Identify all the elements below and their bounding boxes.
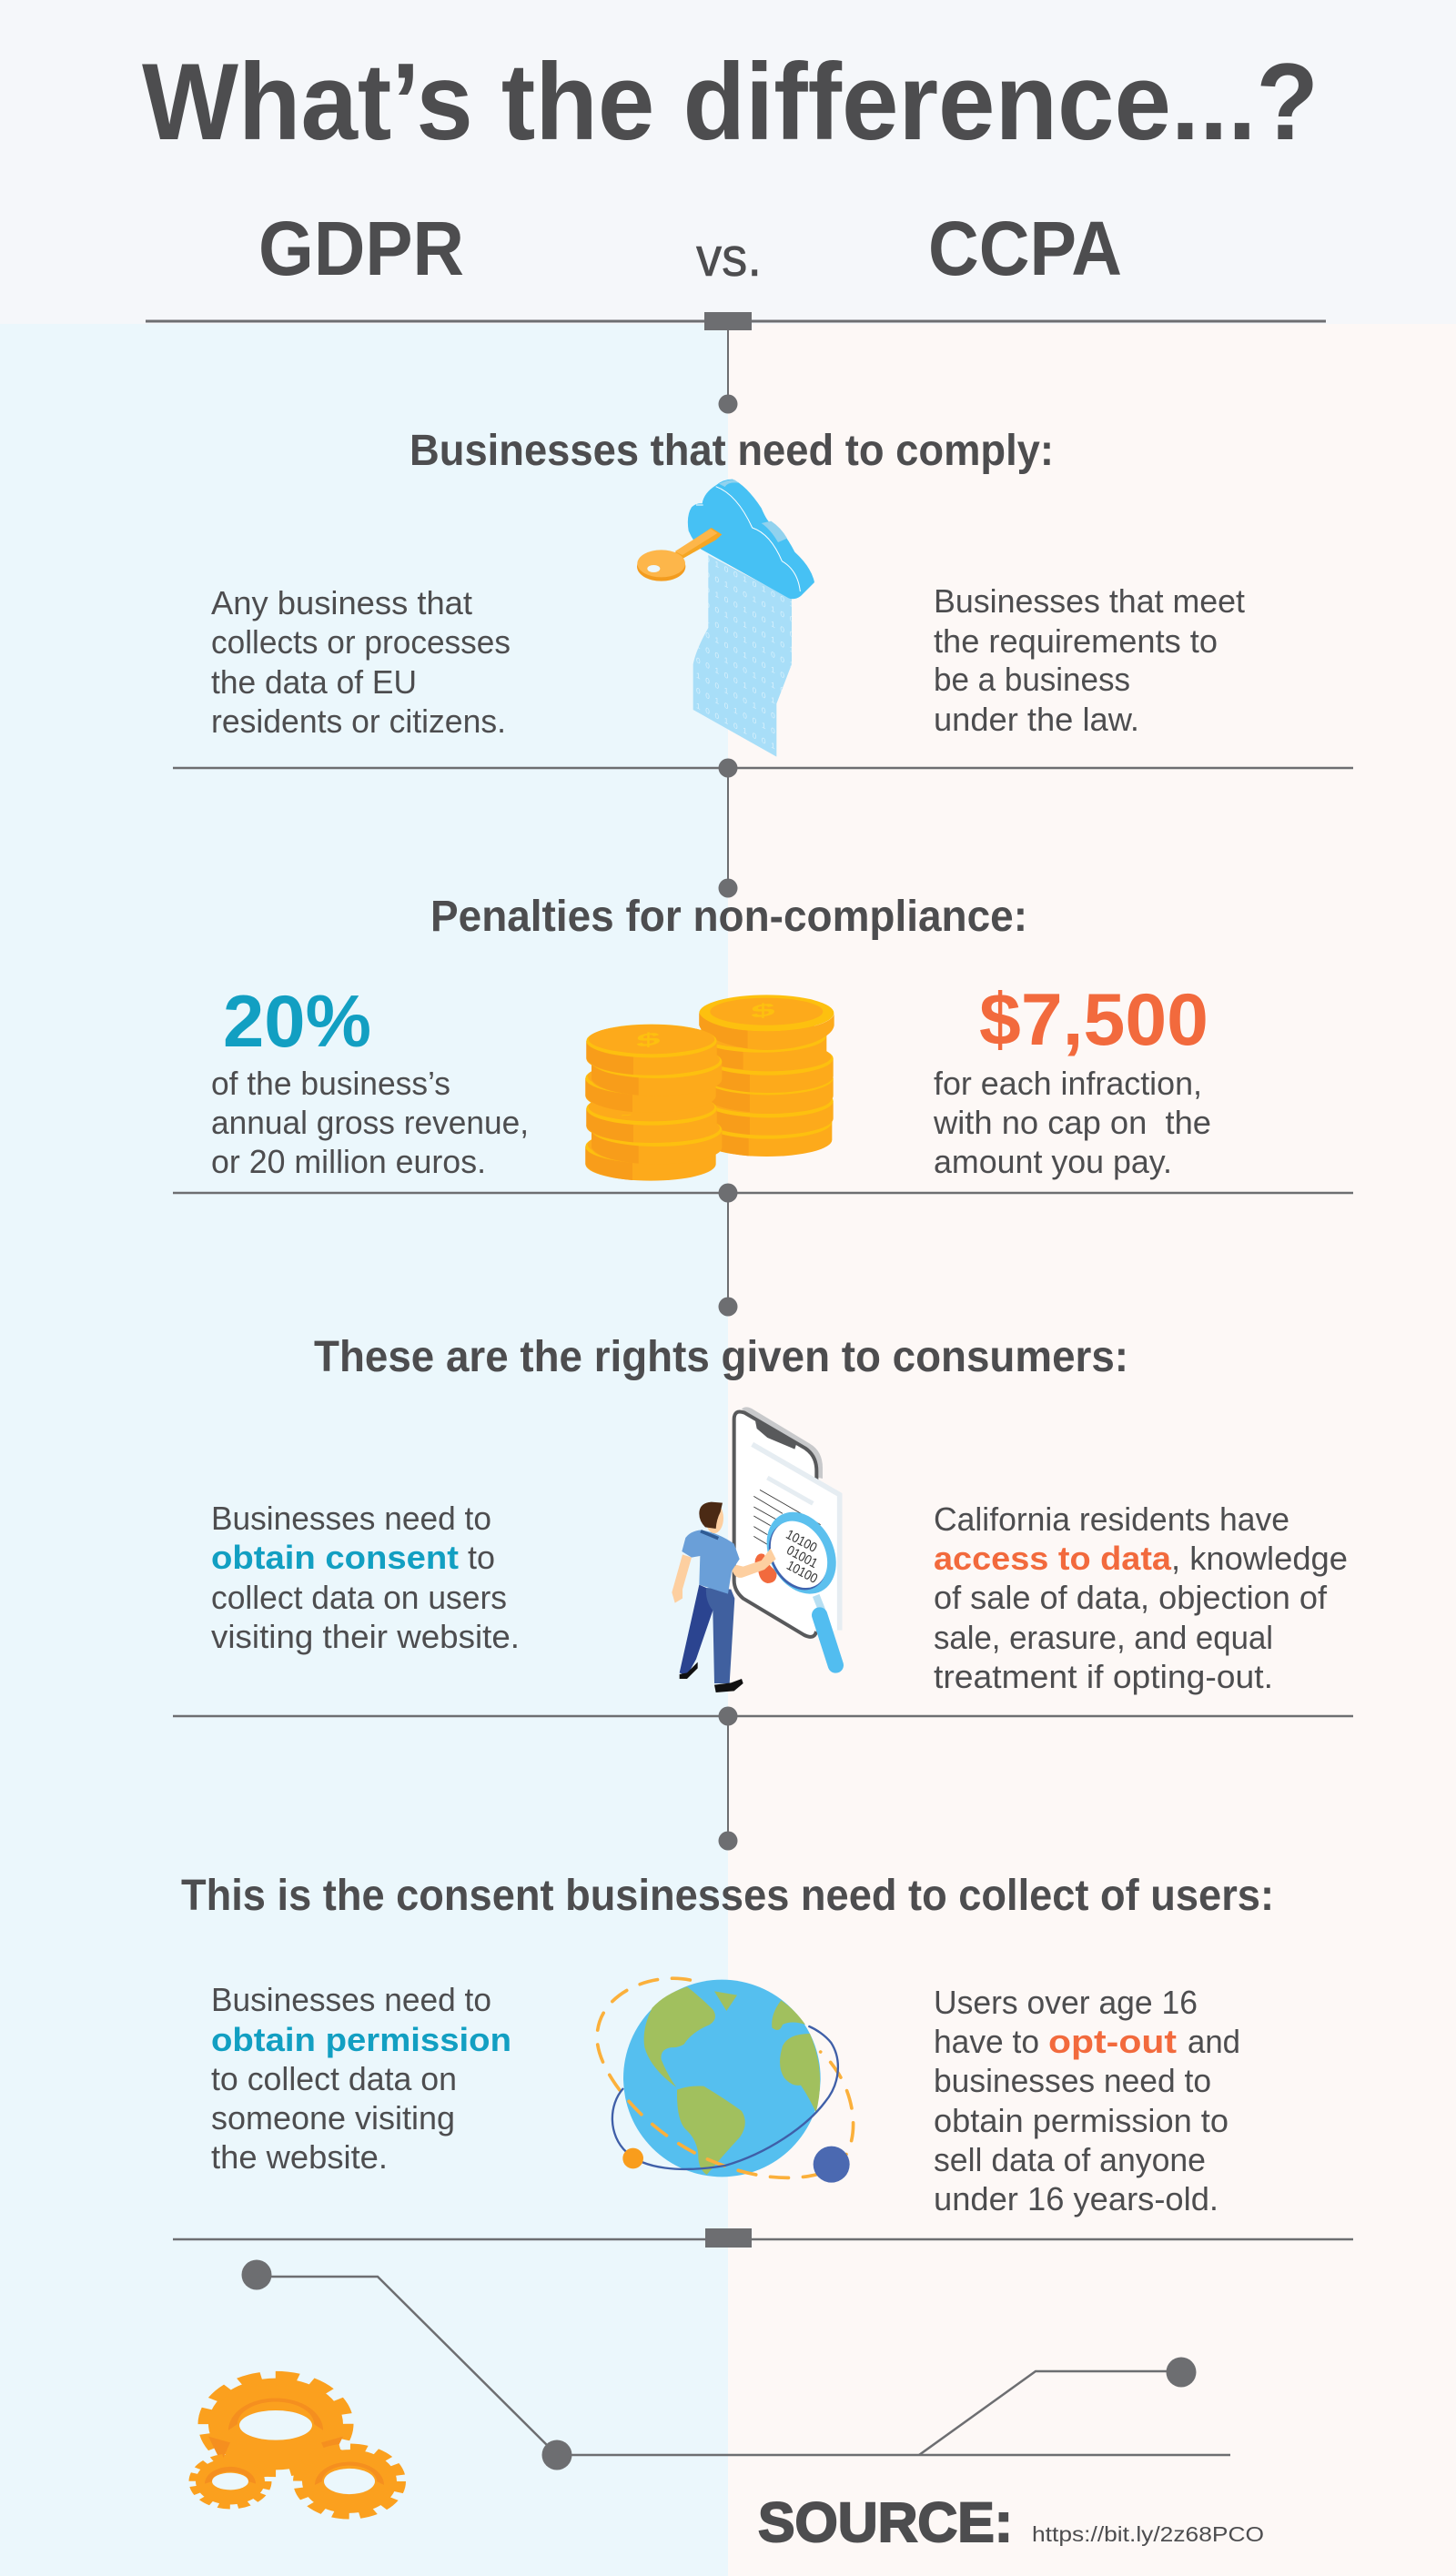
text: CCPA consent (934, 1984, 1240, 2217)
icon: cloud, key and data stream: 1 0 0 1 0 0 1 0 1 0 0 (696, 564, 795, 625)
text: CCPA consent: obtain permission to (934, 2102, 1228, 2139)
text: GDPR who must comply: Any business that (211, 584, 472, 621)
text: CCPA consumer rights: treatment if opting-out. (934, 1658, 1273, 1695)
text: GDPR consent: Businesses need to (211, 1981, 491, 2018)
text: CCPA consumer rights: sale, erasure, and equal (934, 1619, 1273, 1656)
icon: person inspecting phone with magnifier: 10100 (784, 1528, 819, 1556)
icon: gears (193, 2376, 400, 2516)
text: CCPA penalty (933, 1065, 1211, 1180)
heading: GDPR vs. CCPA: CCPA (928, 206, 1122, 291)
decorative circuit lines (242, 2260, 1230, 2470)
text: GDPR who must comply: the data of EU (211, 663, 417, 701)
text: CCPA who must comply: Businesses that meet (934, 582, 1245, 620)
icon: cloud, key and data stream: 0 0 1 0 1 0 0 1 0 0 1 (696, 685, 795, 747)
icon: cloud, key and data stream: 0 0 1 0 0 1 0 0 1 0 0 (696, 625, 795, 686)
icon: coin stacks: $ (636, 1027, 661, 1052)
text: CCPA consent: have to (934, 2023, 1039, 2060)
icon: cloud, key and data stream: 0 0 1 0 0 1 0 0 1 0 0 (696, 655, 795, 716)
text: CCPA who must comply: the requirements to (934, 622, 1218, 660)
icon: cloud, key and data stream: 1 0 0 1 0 0 1 0 0 1 0 (696, 671, 795, 732)
source: SOURCE: (758, 2491, 1013, 2553)
heading: GDPR vs. CCPA (258, 206, 1122, 291)
text: CCPA penalty: with no cap on the (933, 1104, 1211, 1141)
text: CCPA consent: opt-out (1048, 2023, 1177, 2060)
text: CCPA who must comply: under the law. (934, 701, 1139, 738)
section 2 heading: Penalties for non-compliance: (430, 893, 1027, 941)
source: https://bit.ly/2z68PCO (1032, 2522, 1264, 2546)
timeline connectors (146, 312, 1353, 2248)
heading: GDPR vs. CCPA: vs. (696, 227, 762, 288)
text: GDPR consent: the website. (211, 2138, 388, 2176)
text: CCPA who must comply: be a business (934, 661, 1130, 698)
icon: cloud, key and data stream: 1 0 0 1 0 1 0 0 1 0 0 (696, 701, 795, 762)
text: CCPA consent: and (1188, 2023, 1240, 2060)
text: GDPR consumer rights: obtain consent (211, 1539, 459, 1576)
icon: cloud, key and data stream (637, 480, 814, 762)
text: CCPA penalty: for each infraction, (934, 1065, 1202, 1102)
icon: person inspecting phone with magnifier: 01001 (784, 1543, 820, 1571)
icon: coin stacks: $ (751, 998, 775, 1023)
text: CCPA consumer rights: California residents have (934, 1500, 1289, 1538)
text: GDPR penalty (211, 1065, 529, 1180)
icon: person inspecting phone with magnifier (672, 1407, 850, 1692)
icon: coin stacks: - (621, 1112, 632, 1118)
text: GDPR who must comply (211, 584, 511, 740)
text: GDPR who must comply: residents or citizens. (211, 702, 506, 740)
text: CCPA consent: Users over age 16 (934, 1984, 1198, 2021)
text: GDPR penalty: or 20 million euros. (211, 1143, 486, 1180)
text: GDPR penalty: of the business’s (211, 1065, 450, 1102)
stat: 20%: 20% (223, 981, 371, 1063)
icon: cloud, key and data stream: 0 0 1 0 0 1 0 1 0 0 1 (696, 549, 795, 611)
text: GDPR consumer rights: to (468, 1539, 495, 1576)
text: GDPR consumer rights (211, 1500, 520, 1655)
text: CCPA consent: under 16 years-old. (934, 2180, 1218, 2217)
text: GDPR who must comply: collects or processes (211, 623, 511, 661)
stat: $7,500: $7,500 (979, 979, 1208, 1061)
text: GDPR consent: obtain permission (211, 2021, 511, 2058)
icon: coin stacks (585, 995, 834, 1181)
section 1 heading: Businesses that need to comply: (410, 427, 1054, 475)
text: GDPR penalty: annual gross revenue, (211, 1104, 529, 1141)
text: CCPA who must comply (934, 582, 1245, 738)
text: CCPA consumer rights: of sale of data, objection of (934, 1579, 1328, 1616)
text: CCPA consumer rights: , knowledge (1171, 1540, 1348, 1577)
icon: cloud, key and data stream: 0 1 0 0 0 1 0 1 0 0 1 (696, 610, 795, 671)
icon: cloud, key and data stream: 1 0 0 1 0 1 0 0 1 0 1 (696, 594, 795, 656)
text: CCPA consent: businesses need to (934, 2062, 1211, 2099)
text: GDPR consent: to collect data on (211, 2060, 457, 2097)
text: CCPA penalty: amount you pay. (934, 1143, 1172, 1180)
text: GDPR consumer rights: Businesses need to (211, 1500, 491, 1537)
icon: cloud, key and data stream: 1 0 0 1 0 0 1 0 1 0 1 (696, 640, 795, 702)
icon: cloud, key and data stream: 0 0 1 0 0 1 0 0 1 0 0 (696, 580, 795, 641)
text: CCPA consumer rights: access to data (934, 1540, 1172, 1577)
icon: globe with orbits (597, 1978, 854, 2183)
text: GDPR consumer rights: collect data on users (211, 1579, 507, 1616)
text: GDPR consent (211, 1981, 511, 2176)
text: GDPR consent: someone visiting (211, 2099, 455, 2137)
text: GDPR consumer rights: visiting their website. (211, 1618, 520, 1655)
section 4 heading: This is the consent businesses need to collect of users: (181, 1872, 1274, 1920)
title: What’s the difference...? (142, 41, 1319, 163)
icon: person inspecting phone with magnifier: 10100 (784, 1559, 820, 1587)
source (758, 2491, 1264, 2553)
text: CCPA consumer rights (934, 1500, 1348, 1695)
text: CCPA consent: sell data of anyone (934, 2141, 1206, 2178)
section 3 heading: These are the rights given to consumers: (314, 1333, 1128, 1381)
heading: GDPR vs. CCPA: GDPR (258, 206, 464, 291)
